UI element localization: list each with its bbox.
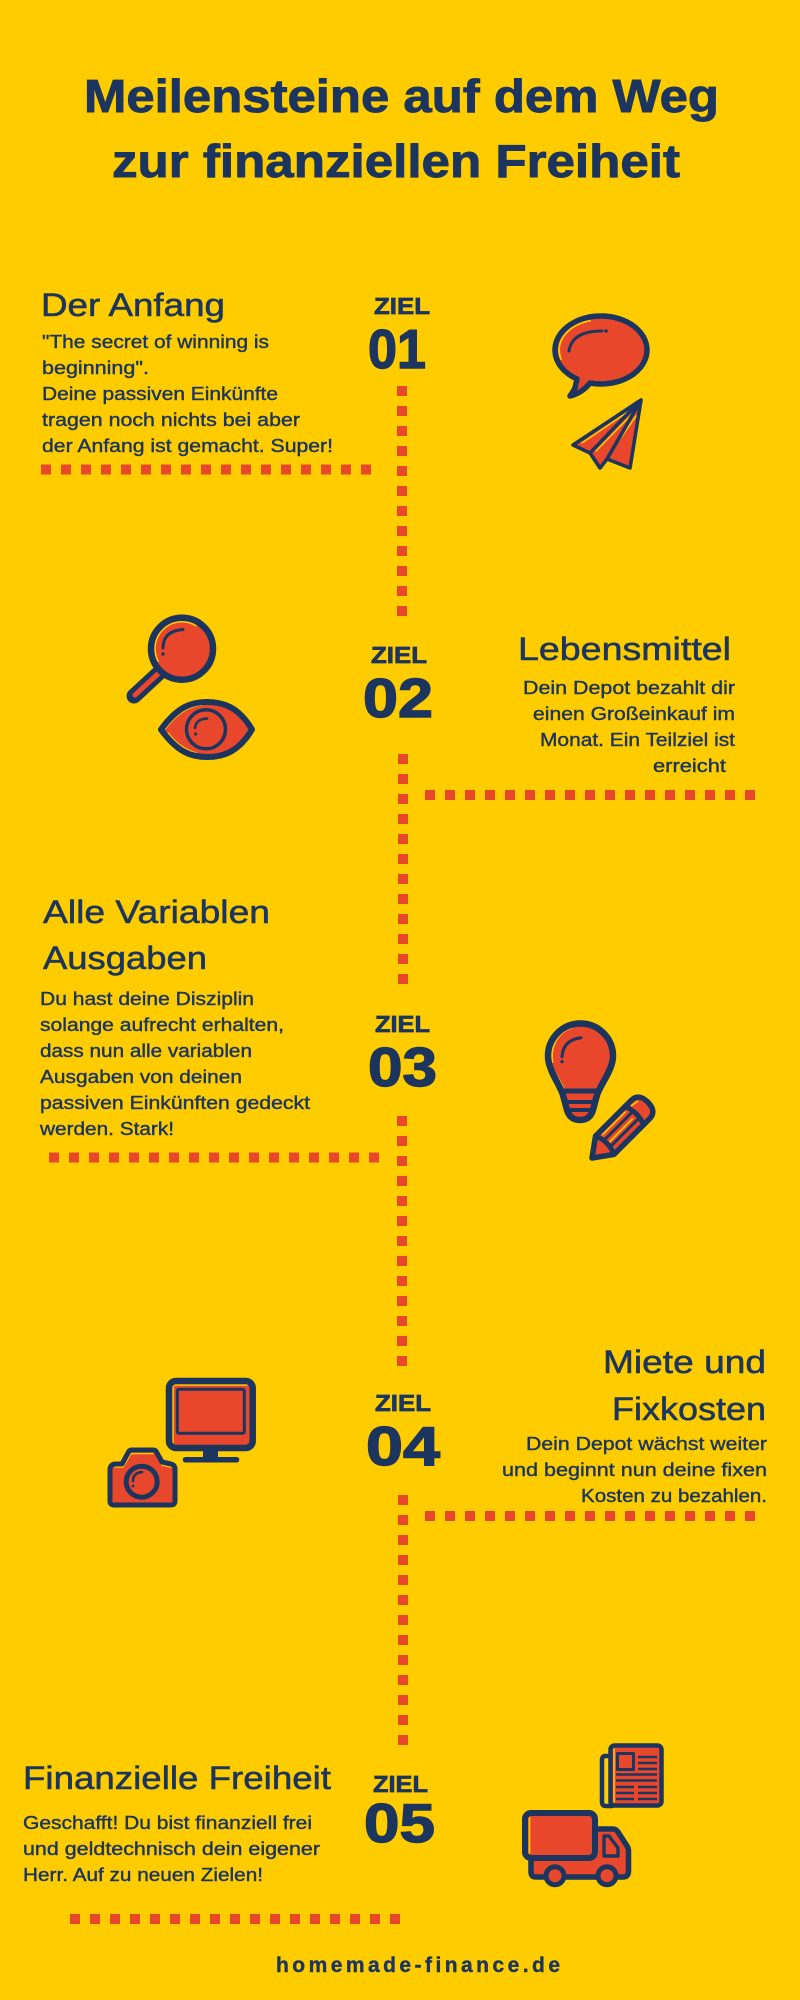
text block: Alle Variablen Ausgaben: passiven Einkünften gedeckt	[40, 1092, 310, 1113]
text block: Der Anfang	[42, 331, 333, 456]
icon: delivery truck	[525, 1813, 628, 1885]
text block: Alle Variablen Ausgaben: solange aufrecht erhalten,	[40, 1014, 284, 1035]
text block: Finanzielle Freiheit: und geldtechnisch dein eigener	[23, 1838, 320, 1859]
icon: light bulb	[548, 1024, 613, 1120]
text block: Miete und Fixkosten	[502, 1433, 767, 1506]
text block: Der Anfang: "The secret of winning is	[42, 331, 269, 352]
dotted connector 1	[41, 386, 402, 616]
text block: Alle Variablen Ausgaben: dass nun alle variablen	[40, 1040, 252, 1061]
label: Ziel 05	[364, 1771, 435, 1854]
label: Ziel 03: 03	[368, 1036, 437, 1098]
heading: Alle Variablen Ausgaben	[43, 894, 270, 976]
panel: Ziel 5 text	[23, 1760, 331, 1885]
icon: speech bubble	[555, 316, 647, 396]
icon: pencil	[583, 1093, 657, 1167]
panel: Ziel 1 text	[41, 287, 333, 456]
text block: Lebensmittel	[523, 677, 735, 776]
heading: Miete und Fixkosten	[603, 1344, 766, 1427]
label: Ziel 01: ZIEL	[374, 293, 430, 319]
label: Ziel 04: 04	[366, 1415, 440, 1477]
icon: magnifying glass	[134, 618, 213, 696]
text block: Lebensmittel: erreicht	[653, 755, 726, 776]
heading: Alle Variablen Ausgaben: Alle Variablen	[43, 894, 270, 930]
title: zur finanziellen Freiheit	[112, 135, 680, 187]
text block: Der Anfang: Deine passiven Einkünfte	[42, 383, 278, 404]
heading: Finanzielle Freiheit: Finanzielle Freiheit	[23, 1760, 331, 1796]
text block: Lebensmittel: Dein Depot bezahlt dir	[523, 677, 735, 698]
heading: Der Anfang: Der Anfang	[41, 287, 225, 323]
text block: Der Anfang: tragen noch nichts bei aber	[42, 409, 300, 430]
heading: Miete und Fixkosten: Miete und	[603, 1344, 766, 1380]
panel: Ziel 2 text	[518, 631, 735, 776]
heading: Alle Variablen Ausgaben: Ausgaben	[43, 940, 207, 976]
text block: Miete und Fixkosten: Kosten zu bezahlen.	[581, 1485, 767, 1506]
dotted connector 2	[403, 754, 755, 984]
text block: Miete und Fixkosten: und beginnt nun deine fixen	[502, 1459, 767, 1480]
icon: eye	[161, 702, 252, 757]
icon: paper plane	[573, 400, 641, 468]
text block: Miete und Fixkosten: Dein Depot wächst weiter	[526, 1433, 767, 1454]
text block: Alle Variablen Ausgaben: Ausgaben von deinen	[40, 1066, 242, 1087]
title: Meilensteine auf dem Weg	[84, 70, 719, 122]
label: Ziel 02	[363, 642, 433, 729]
text block: Finanzielle Freiheit: Geschafft! Du bist finanziell frei	[23, 1812, 312, 1833]
label: Ziel 02: 02	[363, 667, 433, 729]
label: Ziel 05: 05	[364, 1792, 435, 1854]
panel: Ziel 4 text	[502, 1344, 767, 1506]
text block: Finanzielle Freiheit: Herr. Auf zu neuen Zielen!	[23, 1864, 263, 1885]
dotted connector 4	[403, 1495, 755, 1745]
text block: Der Anfang: beginning".	[42, 357, 149, 378]
label: Ziel 01: 01	[368, 318, 426, 380]
label: Ziel 04: ZIEL	[375, 1390, 431, 1416]
heading: Lebensmittel: Lebensmittel	[518, 631, 731, 667]
text block: Finanzielle Freiheit	[23, 1812, 320, 1885]
text block: Alle Variablen Ausgaben: Du hast deine Disziplin	[40, 988, 254, 1009]
icon: camera	[110, 1450, 175, 1505]
text block: Der Anfang: der Anfang ist gemacht. Super!	[42, 435, 333, 456]
label: Ziel 05: ZIEL	[373, 1771, 428, 1797]
label: Ziel 03: ZIEL	[375, 1011, 430, 1037]
label: Ziel 02: ZIEL	[371, 642, 427, 668]
icon: monitor	[169, 1381, 253, 1462]
dotted connector 3	[49, 1116, 402, 1366]
title	[84, 70, 719, 187]
text block: Lebensmittel: einen Großeinkauf im	[533, 703, 735, 724]
icon: newspaper	[602, 1746, 662, 1806]
text block: Alle Variablen Ausgaben: werden. Stark!	[39, 1118, 174, 1139]
text block: Lebensmittel: Monat. Ein Teilziel ist	[540, 729, 735, 750]
label: Ziel 04	[366, 1390, 440, 1477]
footer: website: homemade-finance.de	[276, 1954, 560, 1977]
heading: Miete und Fixkosten: Fixkosten	[612, 1391, 766, 1427]
panel: Ziel 3 text	[39, 894, 310, 1139]
dotted connector 5	[70, 1914, 400, 1924]
text block: Alle Variablen Ausgaben	[39, 988, 310, 1139]
label: Ziel 03	[368, 1011, 437, 1098]
